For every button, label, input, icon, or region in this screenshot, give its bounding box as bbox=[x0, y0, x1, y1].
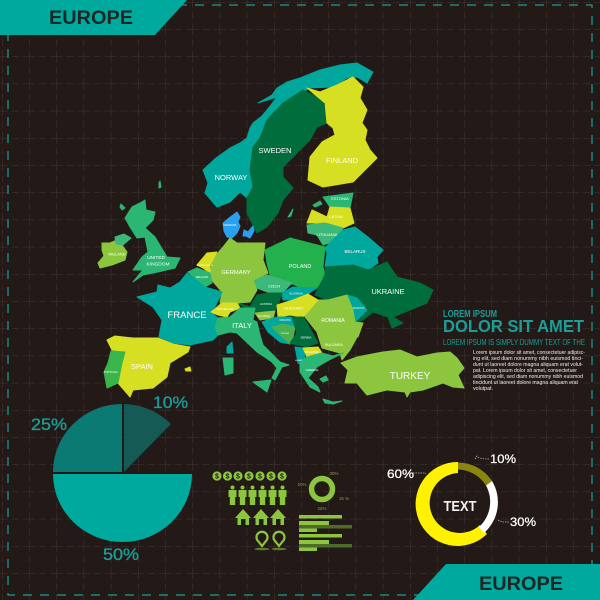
country: Poland: POLAND bbox=[289, 264, 311, 270]
country: Slovenia: SLOVENIA bbox=[258, 314, 271, 318]
country: United Kingdom bbox=[120, 181, 180, 282]
icons: dollar coins: $ bbox=[226, 474, 230, 480]
donut chart bbox=[387, 452, 536, 546]
icons: dollar coins: $ bbox=[280, 474, 284, 480]
small ring chart bbox=[297, 471, 349, 511]
country: Portugal bbox=[104, 351, 125, 388]
country: Latvia bbox=[307, 207, 354, 228]
country: Ukraine: UKRAINE bbox=[371, 287, 405, 296]
text block: Lorem ipsum: Lorem ipsum dolor sit amet, consectetuer adipisc- bbox=[473, 350, 585, 356]
country: Macedonia bbox=[303, 347, 322, 357]
country: Turkey bbox=[341, 350, 464, 397]
country: Hungary: HUNGARY bbox=[284, 306, 304, 310]
text block: Lorem ipsum: adipiscing elit, sed diam nonummy nibh euismod bbox=[473, 374, 583, 380]
country: Switzerland bbox=[211, 303, 240, 317]
country: Sweden bbox=[247, 90, 327, 233]
icons: dollar coins: $ bbox=[236, 474, 240, 480]
country: Bosnia bbox=[272, 324, 295, 344]
donut chart: 30% bbox=[510, 515, 536, 529]
country: Romania: ROMANIA bbox=[321, 318, 345, 324]
text block: Lorem ipsum: dunt ut laoreet dolore magna aliquam erat volut- bbox=[473, 362, 583, 368]
country: United Kingdom: UNITED bbox=[147, 255, 165, 261]
icons: dollar coins: $ bbox=[258, 474, 262, 480]
country: Moldova bbox=[347, 295, 367, 322]
country: Netherlands bbox=[197, 252, 217, 273]
banner: bottom Europe bbox=[413, 564, 600, 600]
country: Croatia bbox=[262, 317, 297, 344]
country: Austria: AUSTRIA bbox=[260, 302, 272, 306]
country: Norway bbox=[203, 63, 373, 207]
country: Bulgaria: BULGARIA bbox=[325, 343, 344, 347]
icons: dollar coins: $ bbox=[269, 474, 273, 480]
country: Italy bbox=[215, 308, 289, 392]
country: Denmark: DENMARK bbox=[224, 223, 237, 227]
icons: location pins bbox=[254, 532, 286, 550]
country: Ireland: IRELAND bbox=[108, 252, 126, 256]
banner: top Europe: EUROPE bbox=[49, 8, 133, 29]
country: Sweden: SWEDEN bbox=[259, 146, 291, 155]
small ring chart: 25% bbox=[317, 506, 327, 511]
banner: bottom Europe: EUROPE bbox=[479, 574, 563, 595]
map of Europe bbox=[98, 63, 464, 404]
country: Spain: SPAIN bbox=[131, 362, 153, 371]
icons: dollar coins: $ bbox=[247, 474, 251, 480]
country: Greece: GREECE bbox=[306, 368, 318, 372]
country: Latvia: LATVIA bbox=[329, 214, 343, 219]
icons: houses bbox=[235, 509, 286, 525]
icons: people bbox=[228, 486, 286, 505]
bar chart bbox=[299, 515, 352, 551]
country: Hungary bbox=[277, 294, 318, 317]
country: Norway: NORWAY bbox=[215, 173, 247, 182]
country: Czech Republic bbox=[252, 275, 292, 293]
country: Italy: ITALY bbox=[232, 321, 252, 330]
country: Bulgaria bbox=[317, 332, 357, 360]
donut chart: 10% bbox=[490, 452, 516, 466]
small ring chart: 30% bbox=[329, 471, 339, 476]
country: France bbox=[137, 273, 222, 345]
islands: Baltic bbox=[288, 201, 322, 217]
country: Slovenia bbox=[255, 311, 275, 320]
country: Serbia: SERBIA bbox=[300, 336, 312, 340]
country: Moldova: MOLDOVA bbox=[352, 306, 365, 310]
country: Belarus: BELARUS bbox=[344, 249, 366, 254]
country: Albania: ALBANIA bbox=[295, 359, 305, 362]
country: Lithuania bbox=[307, 223, 343, 245]
country: Slovakia bbox=[282, 287, 317, 300]
country: Estonia bbox=[323, 193, 353, 208]
country: Belgium bbox=[188, 268, 212, 287]
text block: Lorem ipsum: ing elit, sed diam nonummy nibh euismod tinci- bbox=[473, 356, 583, 362]
text block: Lorem ipsum: volutpat. bbox=[473, 386, 493, 392]
text block: Lorem ipsum: DOLOR SIT AMET bbox=[443, 316, 584, 336]
icons: dollar coins: $ bbox=[215, 474, 219, 480]
pie chart: 25% bbox=[31, 416, 67, 434]
country: Slovakia: SLOVAKIA bbox=[289, 292, 303, 296]
country: Portugal: PORTUGAL bbox=[104, 370, 119, 374]
country: Denmark bbox=[223, 212, 254, 238]
country: Spain bbox=[107, 336, 191, 397]
country: Bosnia: BOSNIA bbox=[281, 332, 289, 335]
country: Germany bbox=[210, 238, 268, 303]
pie chart: 50% bbox=[103, 546, 139, 564]
small ring chart: 15 % bbox=[339, 496, 349, 501]
country: Finland bbox=[307, 77, 377, 187]
country: Belarus bbox=[325, 227, 383, 270]
text block: Lorem ipsum: tincidunt ut laoreet dolore magna aliquam erat bbox=[473, 380, 578, 386]
country: Romania bbox=[305, 295, 363, 337]
country: Macedonia: MACEDONIA bbox=[305, 351, 320, 354]
pie chart: 10% bbox=[153, 394, 188, 412]
pie chart bbox=[31, 394, 192, 564]
country: France: FRANCE bbox=[167, 310, 207, 321]
text block: Lorem ipsum bbox=[443, 309, 585, 392]
country: Lithuania: LITHUANIA bbox=[317, 232, 338, 237]
country: Czech Republic: CZECH bbox=[268, 284, 280, 288]
country: Poland bbox=[265, 238, 325, 288]
country: Finland: FINLAND bbox=[326, 156, 359, 165]
country: Greece bbox=[300, 353, 343, 404]
country: Serbia bbox=[290, 317, 318, 347]
country: Ireland bbox=[98, 234, 131, 268]
country: Ukraine bbox=[315, 262, 433, 328]
country: Albania bbox=[295, 347, 305, 367]
country: Austria bbox=[237, 293, 282, 312]
country: Netherlands: NETHERLANDS bbox=[197, 264, 214, 267]
country: Switzerland: SWITZERLAND bbox=[216, 308, 234, 311]
donut chart: 60% bbox=[387, 467, 414, 481]
banner: top Europe bbox=[0, 0, 187, 35]
small ring chart: 20% bbox=[297, 482, 307, 487]
country: Germany: GERMANY bbox=[221, 270, 251, 276]
country: Estonia: ESTONIA bbox=[331, 196, 349, 201]
country: Turkey: TURKEY bbox=[390, 371, 431, 382]
country: Croatia: CROATIA bbox=[279, 318, 291, 322]
donut chart: TEXT bbox=[444, 499, 477, 515]
country: Belgium: BELGIUM bbox=[196, 275, 208, 279]
country: United Kingdom: KINGDOM bbox=[147, 262, 169, 268]
text block: Lorem ipsum: LOREM IPSUM bbox=[443, 309, 497, 320]
icons: dollar coins bbox=[212, 471, 287, 481]
text block: Lorem ipsum: pat. Lorem ipsum dolor sit amet, consectetuer bbox=[473, 368, 577, 374]
